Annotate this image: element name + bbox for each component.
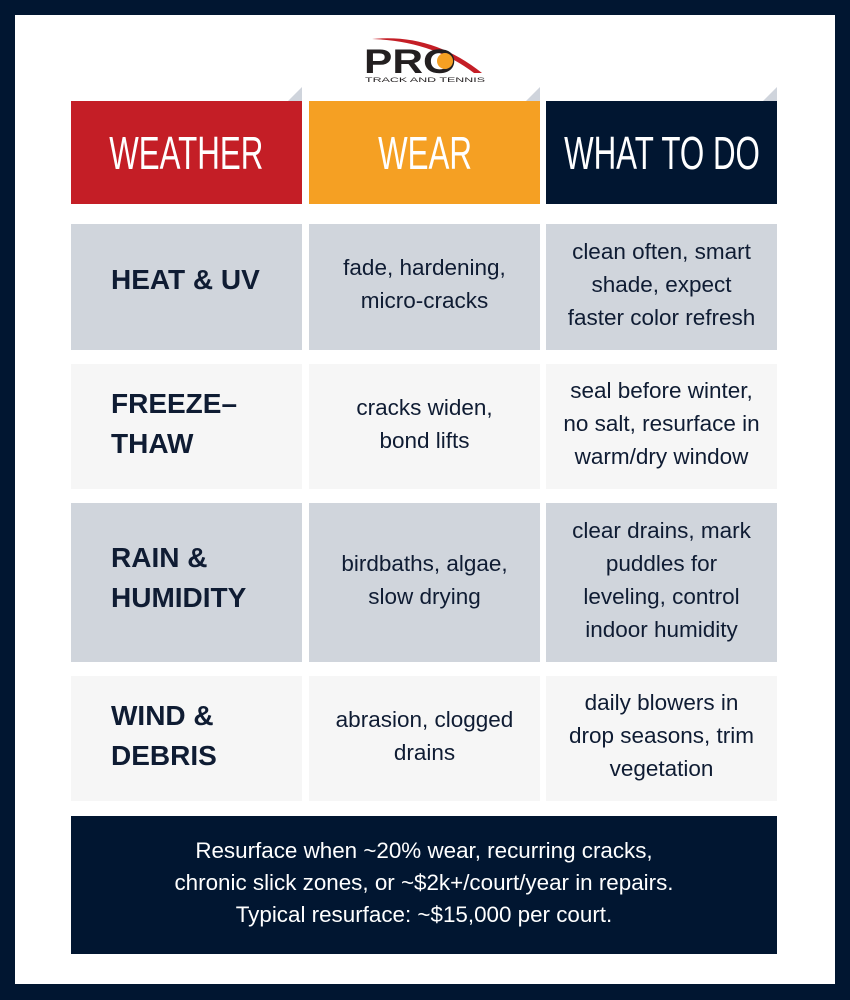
row: heat & uv: clean often, smart [572, 238, 751, 264]
row: freeze-thaw [71, 364, 777, 489]
header: weather: WEATHER [109, 126, 264, 178]
row: wind & debris: DEBRIS [111, 740, 217, 770]
row: heat & uv: fade, hardening, [343, 255, 506, 280]
row: heat & uv [71, 224, 777, 350]
row: freeze-thaw: FREEZE– [111, 388, 237, 418]
row: heat & uv: micro-cracks [361, 288, 488, 313]
footer callout: chronic slick zones, or ~$2k+/court/year in repairs. [174, 870, 674, 895]
row: rain & humidity: leveling, control [583, 584, 740, 608]
footer callout: Typical resurface: ~$15,000 per court. [236, 902, 612, 927]
row: wind & debris: drains [394, 740, 455, 764]
row: wind & debris: WIND & [111, 700, 214, 730]
row: rain & humidity: clear drains, mark [572, 518, 751, 542]
row: rain & humidity: RAIN & [111, 542, 207, 572]
row: rain & humidity: puddles for [606, 550, 717, 576]
logo [364, 38, 486, 83]
row: freeze-thaw: no salt, resurface in [563, 411, 760, 436]
row: freeze-thaw: THAW [111, 428, 193, 458]
row: wind & debris: abrasion, clogged [336, 706, 513, 732]
row: heat & uv: faster color refresh [568, 304, 755, 330]
header: wear: WEAR [378, 126, 471, 178]
header: wear [309, 101, 540, 204]
row: rain & humidity: indoor humidity [585, 616, 738, 642]
footer callout [71, 816, 777, 954]
footer callout: Resurface when ~20% wear, recurring cracks, [195, 838, 653, 863]
logo: PRO [364, 43, 456, 81]
row: rain & humidity: birdbaths, algae, [341, 550, 508, 576]
row: freeze-thaw: warm/dry window [575, 444, 748, 469]
header: what to do: WHAT TO DO [564, 126, 759, 178]
row: rain & humidity: slow drying [368, 584, 481, 608]
row: freeze-thaw: bond lifts [379, 428, 470, 452]
row: wind & debris: drop seasons, trim [569, 723, 754, 748]
row: freeze-thaw: cracks widen, [356, 394, 493, 420]
row: rain & humidity: HUMIDITY [111, 582, 246, 612]
row: rain & humidity [71, 503, 777, 662]
row: heat & uv: shade, expect [591, 272, 732, 296]
row: heat & uv: HEAT & UV [111, 264, 260, 295]
header: weather [71, 101, 302, 204]
row: wind & debris [71, 676, 777, 801]
row: wind & debris: vegetation [610, 756, 713, 781]
row: wind & debris: daily blowers in [585, 690, 738, 715]
header: what to do [546, 101, 777, 204]
row: freeze-thaw: seal before winter, [570, 378, 753, 403]
